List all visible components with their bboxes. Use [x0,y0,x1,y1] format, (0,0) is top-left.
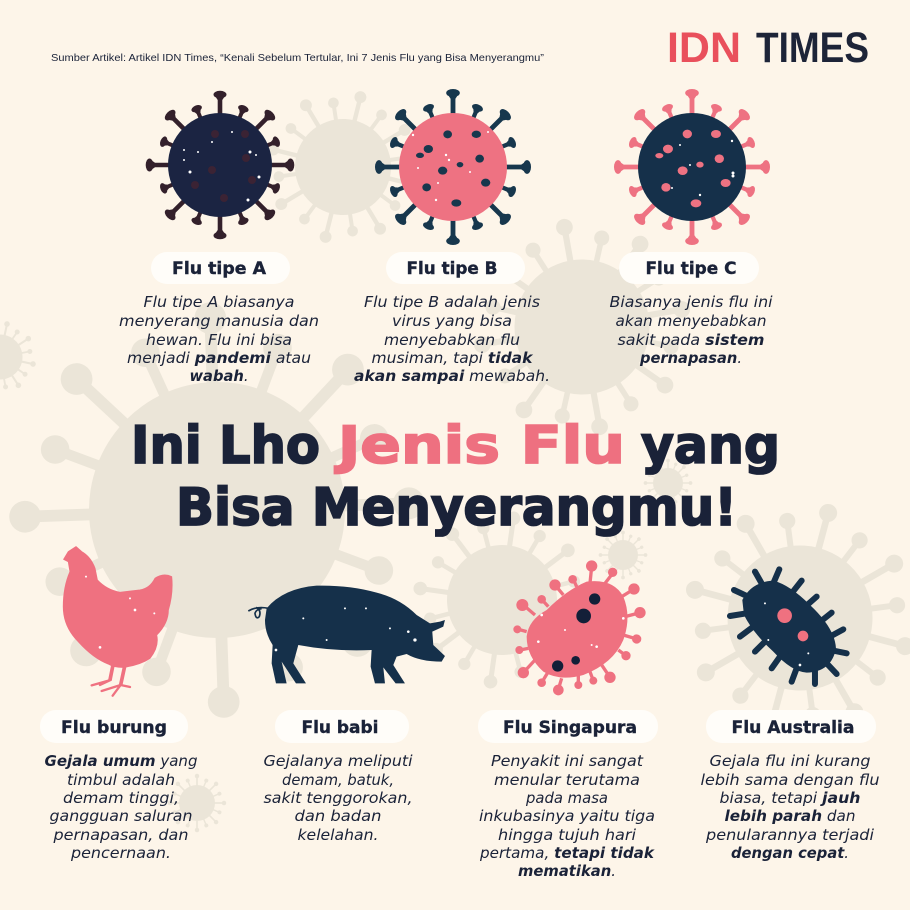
text: Flu tipe C description: pernapasan. [639,349,742,367]
label pill: Flu tipe B [386,252,525,284]
text: Flu burung description: demam tinggi, [63,789,179,807]
logo: IDN Times: TIMES [756,24,869,72]
logo: IDN Times: IDN [667,24,741,72]
icon: Australian flu virus [730,569,847,684]
text: Flu babi description: kelelahan. [298,826,378,844]
text: Flu tipe C description: sakit pada sistem [618,331,764,349]
text: Flu tipe B description: Flu tipe B adalah jenis [364,293,540,311]
label pill: Flu Singapura: Flu Singapura [503,718,637,738]
text: Flu burung description: Gejala umum yang [44,752,198,770]
text: Flu Singapura description: mematikan. [518,862,616,880]
icon: virus type A [146,91,294,239]
text: Flu babi description: dan badan [294,807,382,825]
label pill: Flu burung [40,710,188,743]
text: Flu Singapura description: menular terutama [494,771,640,789]
label pill: Flu tipe A: Flu tipe A [172,259,267,279]
text: Flu Australia description: biasa, tetapi jauh [720,789,860,807]
text: Flu burung description: timbul adalah [67,771,175,789]
text: Flu tipe C description [610,293,773,367]
text: Flu tipe C description: akan menyebabkan [616,312,766,330]
text: Flu tipe B description: virus yang bisa [392,312,512,330]
text: Flu Australia description: lebih parah dan [724,807,856,825]
label pill: Flu babi [275,710,409,743]
title: Jenis Flu [335,416,625,476]
text: Flu tipe A description [119,293,319,385]
text: Flu babi description [264,752,413,844]
text: Flu tipe A description: hewan. Flu ini bisa [146,331,292,349]
title: Bisa Menyerangmu! [176,478,737,538]
icon: Singapore flu virus [515,562,644,694]
text: Flu tipe B description: akan sampai mewabah. [354,367,550,385]
text: Flu babi description: Gejalanya meliputi [264,752,413,770]
text: Flu Australia description: lebih sama dengan flu [700,771,880,789]
label pill: Flu tipe C [619,252,759,284]
text: Flu Australia description: dengan cepat. [731,844,849,862]
text: Flu babi description: sakit tenggorokan, [264,789,412,807]
source line: Sumber Artikel: Artikel IDN Times, “Kenali Sebelum Tertular, Ini 7 Jenis Flu yang Bisa Menyerangmu” [51,52,545,64]
text: Flu tipe B description: menyebabkan flu [384,331,520,349]
text: Flu Australia description [700,752,880,862]
label pill: Flu babi: Flu babi [302,718,378,738]
title [131,416,780,538]
label pill: Flu burung: Flu burung [61,718,167,738]
text: Flu tipe A description: wabah. [190,367,248,385]
label pill: Flu tipe B: Flu tipe B [406,259,498,279]
icon: chicken [63,547,172,696]
text: Flu burung description: pencernaan. [70,844,171,862]
label pill: Flu Australia [706,710,876,743]
title: yang [641,416,780,476]
text: Flu burung description: gangguan saluran [50,807,192,825]
title: Ini Lho [131,416,320,476]
logo: IDN Times [667,24,869,72]
text: Flu Singapura description: pada masa [525,789,608,807]
text: Flu Singapura description: inkubasinya yaitu tiga [479,807,655,825]
text: Flu Singapura description: hingga tujuh hari [498,826,637,844]
text: Flu tipe A description: menyerang manusia dan [119,312,319,330]
text: Flu Australia description: penularannya terjadi [705,826,875,844]
label pill: Flu Singapura [478,710,658,743]
label pill: Flu tipe C: Flu tipe C [646,259,736,279]
label pill: Flu tipe A [151,252,290,284]
text: Flu Singapura description: Penyakit ini sangat [491,752,644,770]
text: Flu tipe C description: Biasanya jenis flu ini [610,293,773,311]
text: Flu Australia description: Gejala flu ini kurang [710,752,871,770]
text: Flu burung description [44,752,198,862]
text: Flu babi description: demam, batuk, [282,771,394,789]
text: Flu tipe A description: menjadi pandemi atau [127,349,311,367]
text: Flu tipe B description: musiman, tapi tidak [372,349,534,367]
icon: virus type B [375,89,531,245]
icon: virus type C [614,89,770,245]
text: Flu tipe A description: Flu tipe A biasanya [144,293,294,311]
text: Flu tipe B description [354,293,550,385]
text: Flu Singapura description [479,752,656,880]
text: Flu Singapura description: pertama, tetapi tidak [479,844,656,862]
label pill: Flu Australia: Flu Australia [732,718,854,738]
text: Flu burung description: pernapasan, dan [52,826,189,844]
icon: pig [248,586,445,683]
